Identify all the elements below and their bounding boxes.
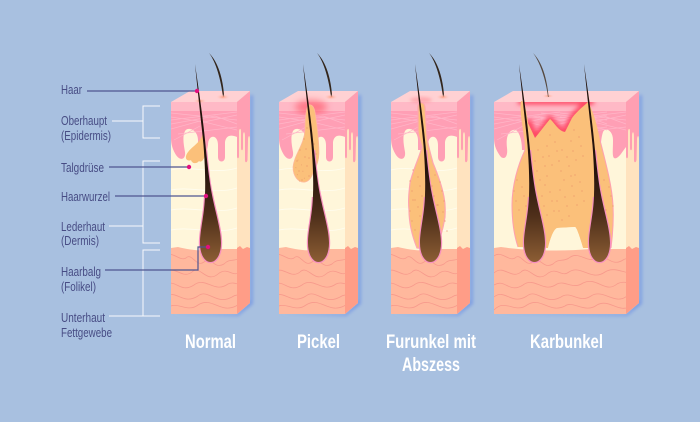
- label: Lederhaut (Dermis): (Dermis): [61, 233, 99, 248]
- panel: Pickel skin block: [273, 53, 440, 316]
- title: Furunkel mit Abszess: Abszess: [402, 355, 460, 376]
- abscess: [409, 102, 448, 250]
- title: Furunkel mit Abszess: [386, 332, 477, 376]
- icon: sebaceous gland: [186, 133, 205, 163]
- panel: Furunkel skin block: [385, 53, 552, 316]
- title: Pickel: Pickel: [297, 332, 340, 353]
- leader: Haarbalg: [105, 245, 210, 270]
- label: Oberhaupt (Epidermis): (Epidermis): [61, 128, 111, 143]
- leader: Haar: [87, 89, 199, 93]
- label: Unterhaut Fettgewebe: [61, 310, 112, 340]
- leader: Talgdrüse: [109, 165, 191, 169]
- label: Unterhaut Fettgewebe: Unterhaut: [61, 310, 105, 325]
- label: Talgdrüse: Talgdrüse: [61, 160, 104, 175]
- label: Oberhaupt (Epidermis): [61, 113, 111, 143]
- labels and leader lines: [61, 82, 210, 340]
- label: Lederhaut (Dermis): [61, 219, 105, 248]
- leader: Haarwurzel: [115, 194, 208, 198]
- bracket: Epidermis: [112, 106, 160, 138]
- label: Haarbalg (Folikel): Haarbalg: [61, 264, 101, 279]
- title: Normal: Normal: [185, 332, 236, 353]
- label: Haar: Haar: [61, 82, 82, 97]
- panel: Normal skin block: [165, 53, 332, 316]
- label: Haarwurzel: Haarwurzel: [61, 189, 110, 204]
- bracket: Unterhaut: [109, 250, 160, 316]
- label: Haarbalg (Folikel): (Folikel): [61, 279, 96, 294]
- label: Oberhaupt (Epidermis): Oberhaupt: [61, 113, 107, 128]
- carbuncle abscess: [512, 101, 614, 248]
- title: Furunkel mit Abszess: Furunkel mit: [386, 332, 477, 353]
- panel: Karbunkel skin block: [494, 53, 661, 316]
- label: Haarbalg (Folikel): [61, 264, 101, 294]
- bracket: Dermis: [109, 161, 160, 243]
- label: Unterhaut Fettgewebe: Fettgewebe: [61, 325, 112, 340]
- title: Karbunkel: Karbunkel: [530, 332, 603, 353]
- red inflammation glow: [518, 102, 594, 138]
- pimple pus sac: [293, 105, 319, 182]
- label: Lederhaut (Dermis): Lederhaut: [61, 219, 105, 234]
